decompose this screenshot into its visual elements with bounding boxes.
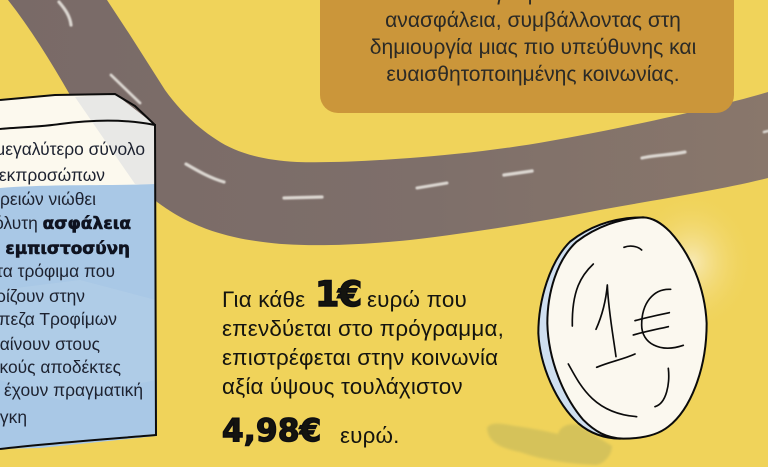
callout text: ευαισθητοποιημένης κοινωνίας. xyxy=(386,63,680,86)
panel: text callout xyxy=(320,0,734,113)
paragraph: value per euro: 4,98€ xyxy=(222,413,322,449)
road dashes xyxy=(59,2,768,198)
box text: εμπιστοσύνη xyxy=(5,238,130,258)
callout text: ανασφάλεια, συμβάλλοντας στη xyxy=(385,9,681,32)
paragraph: value per euro xyxy=(222,275,504,449)
paragraph: value per euro: αξία ύψους τουλάχιστον xyxy=(222,374,463,399)
paragraph: value per euro: ευρώ που xyxy=(367,287,467,312)
paragraph: value per euro: επενδύεται στο πρόγραμμα, xyxy=(222,316,504,341)
callout text xyxy=(370,0,696,86)
paragraph: value per euro: 1€ xyxy=(315,275,361,315)
paragraph: value per euro: Για κάθε xyxy=(222,287,305,312)
callout text: δημιουργία μιας πιο υπεύθυνης και xyxy=(370,36,696,59)
paragraph: value per euro: επιστρέφεται στην κοινωνία xyxy=(222,345,498,370)
paragraph: value per euro: ευρώ. xyxy=(340,423,400,448)
box text xyxy=(0,139,145,427)
box text: εκπροσώπων xyxy=(0,165,105,185)
